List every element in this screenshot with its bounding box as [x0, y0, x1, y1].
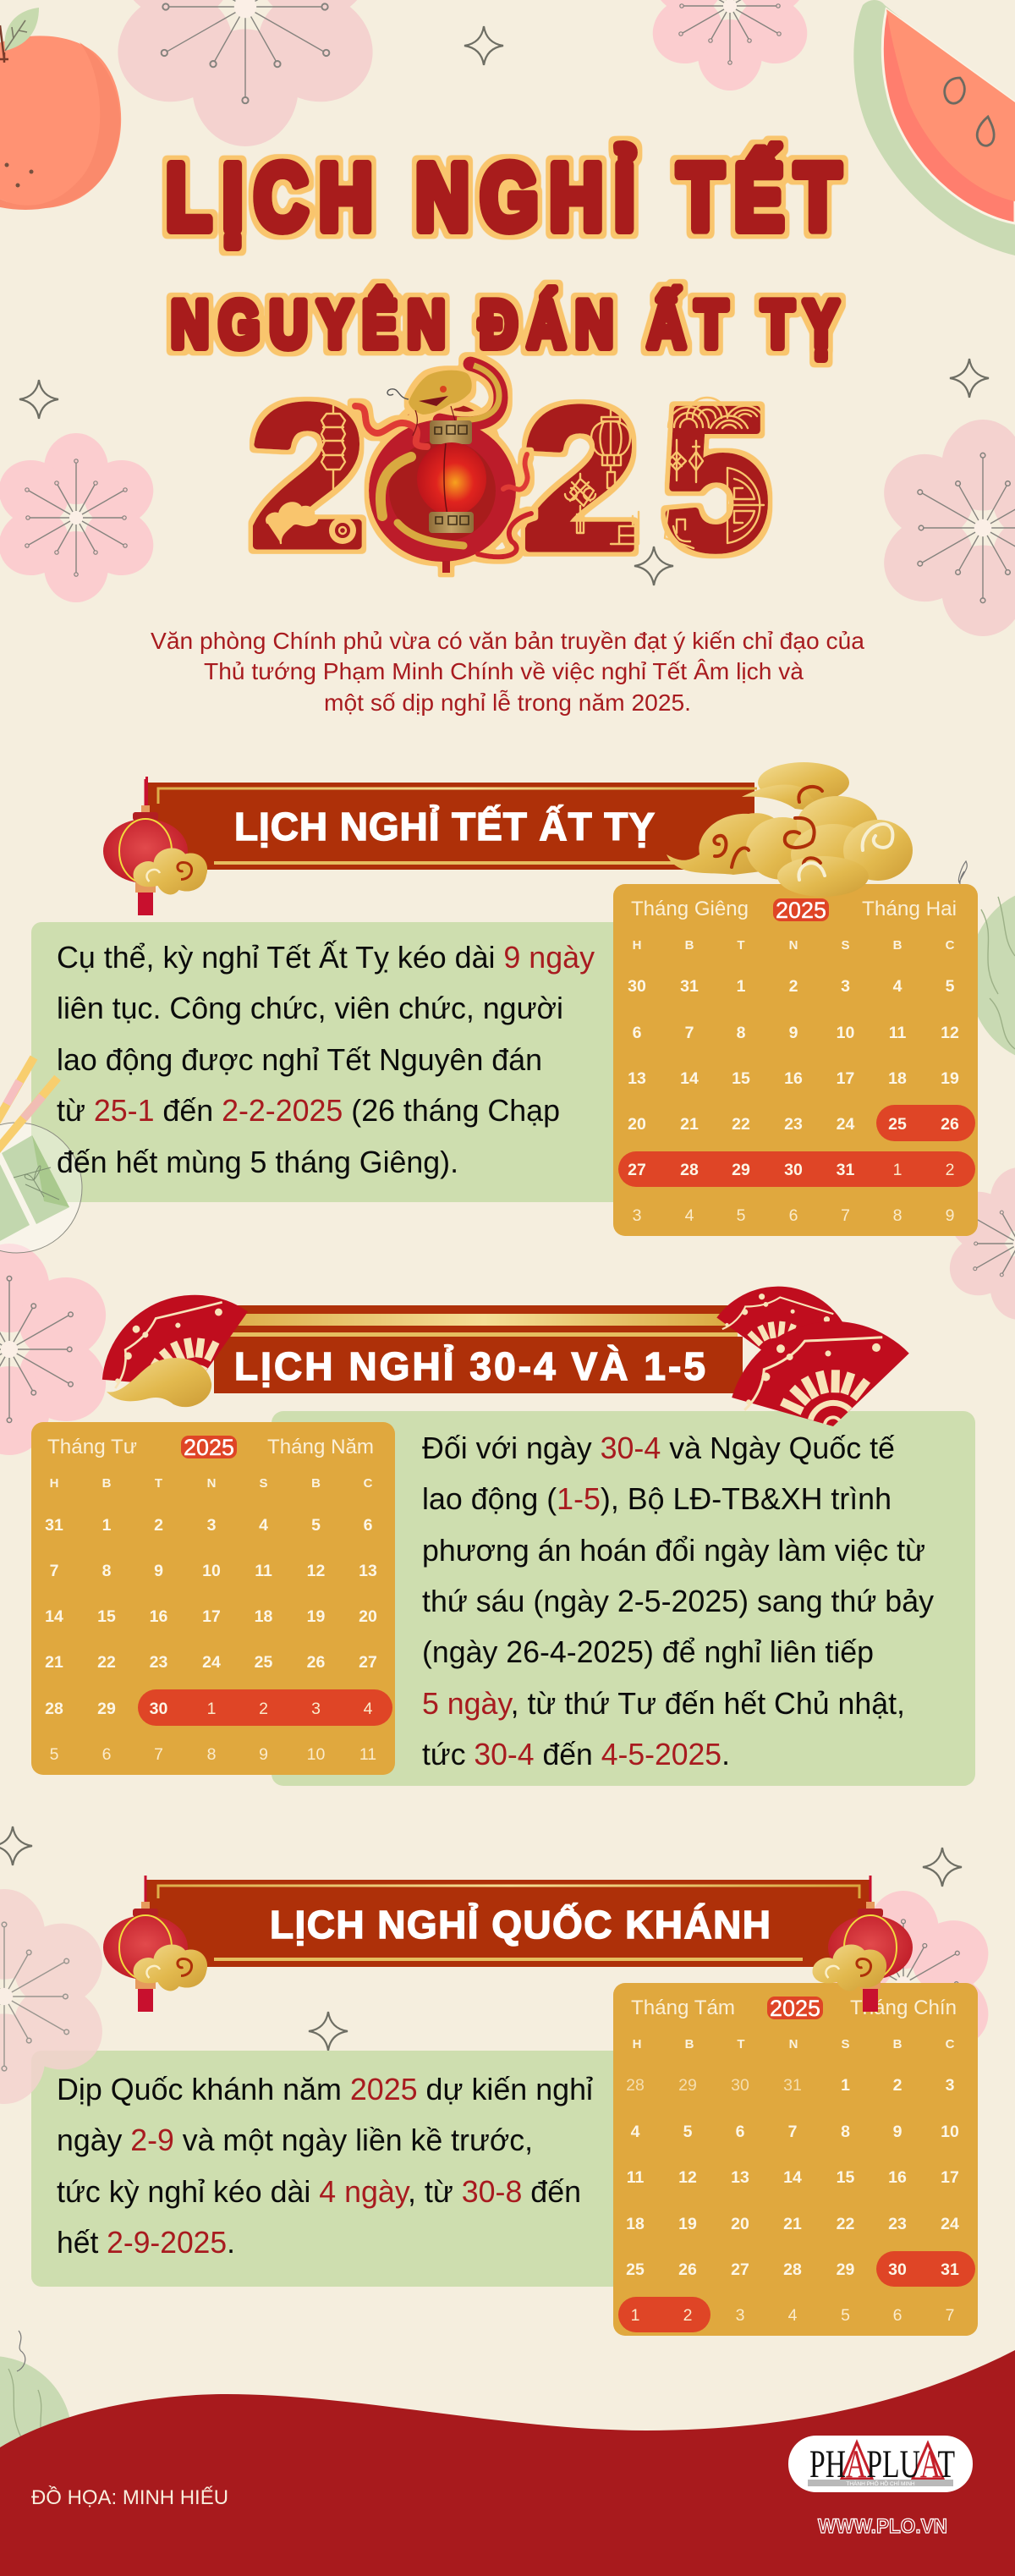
- calendar grid: 24: [202, 1653, 221, 1672]
- calendar grid: 25: [626, 2260, 645, 2279]
- calendar grid: 26: [941, 1115, 959, 1134]
- calendar grid: [626, 2037, 959, 2325]
- digits 2025: 5: [663, 367, 770, 591]
- calendar grid: 11: [255, 1562, 272, 1580]
- calendar grid: 28: [783, 2260, 802, 2279]
- credit: ĐỒ HỌA: MINH HIẾU: [31, 2485, 228, 2509]
- calendar grid: 4: [685, 1206, 694, 1225]
- calendar grid: 7: [946, 2306, 954, 2325]
- logo: [788, 2436, 973, 2492]
- calendar grid: H: [633, 938, 641, 953]
- banner: section one: [103, 762, 913, 915]
- panel: calendar April May: [31, 1422, 395, 1775]
- decor: blossom left of section two: [0, 1244, 121, 1455]
- calendar grid: 29: [732, 1161, 750, 1179]
- calendar grid: 2: [154, 1516, 163, 1535]
- calendar grid: 23: [784, 1115, 803, 1134]
- calendar grid: 30: [888, 2260, 907, 2279]
- calendar grid: 7: [685, 1024, 694, 1042]
- calendar grid: 3: [946, 2076, 955, 2095]
- calendar grid: 13: [628, 1069, 646, 1088]
- calendar grid: 24: [837, 1115, 854, 1134]
- calendar grid: 10: [837, 1024, 854, 1042]
- calendar grid: 4: [364, 1700, 373, 1718]
- calendar grid: 3: [207, 1516, 217, 1535]
- calendar grid: 26: [678, 2260, 697, 2279]
- decor: blossom right of first calendar: [939, 1167, 1015, 1320]
- calendar grid: 12: [307, 1562, 325, 1580]
- calendar grid: 5: [50, 1745, 59, 1764]
- calendar grid: 9: [893, 2123, 903, 2141]
- calendar grid: 23: [150, 1653, 167, 1672]
- calendar grid: 27: [731, 2260, 749, 2279]
- calendar grid: H: [50, 1476, 58, 1491]
- calendar grid: 3: [736, 2306, 744, 2325]
- calendar grid: 7: [841, 1206, 850, 1225]
- calendar grid: 6: [789, 1206, 798, 1225]
- digits 2025: [250, 365, 770, 591]
- icon: back right fan: [713, 1280, 852, 1369]
- icon: blossom right: [869, 420, 1015, 636]
- calendar grid: 4: [259, 1516, 268, 1535]
- calendar grid: B: [311, 1476, 321, 1491]
- calendar grid: 7: [50, 1562, 58, 1580]
- calendar grid: 21: [45, 1653, 63, 1672]
- calendar grid: 7: [788, 2123, 797, 2141]
- calendar grid: T: [155, 1476, 162, 1491]
- calendar grid: 11: [627, 2168, 644, 2187]
- calendar grid: 8: [841, 2123, 850, 2141]
- icon: watermelon: [853, 0, 1015, 255]
- calendar grid: 17: [202, 1607, 221, 1626]
- intro text: [151, 628, 864, 716]
- intro text: Văn phòng Chính phủ vừa có văn bản truyền đạt ý kiến chỉ đạo của: [151, 628, 864, 654]
- calendar grid: 13: [731, 2168, 749, 2187]
- calendar grid: [45, 1476, 377, 1764]
- calendar grid: N: [789, 938, 798, 953]
- calendar grid: 1: [841, 2076, 850, 2095]
- logo: PHAPLUAT: [809, 2442, 955, 2486]
- calendar grid: B: [685, 2037, 694, 2051]
- decor: blossom behind right lantern: [805, 1891, 1001, 2077]
- calendar header: Tháng Hai: [862, 898, 957, 920]
- calendar grid: 5: [946, 977, 955, 996]
- digits 2025: 0: [384, 366, 504, 590]
- intro text: Thủ tướng Phạm Minh Chính về việc nghỉ Tết Âm lịch và: [204, 658, 804, 684]
- calendar grid: 25: [255, 1653, 272, 1672]
- calendar grid: [628, 938, 959, 1225]
- decor: green leaf bottom left: [0, 2331, 72, 2517]
- calendar grid: 16: [784, 1069, 803, 1088]
- body text: tức kỳ nghỉ kéo dài 4 ngày, từ 30-8 đến: [57, 2174, 581, 2209]
- panel: text section one: [0, 922, 623, 1253]
- calendar grid: 13: [359, 1562, 377, 1580]
- icon: left lantern: [103, 1876, 207, 2012]
- calendar grid: 9: [154, 1562, 163, 1580]
- digits 2025: 2: [522, 367, 639, 591]
- calendar grid: 4: [631, 2123, 640, 2141]
- calendar header: Tháng Chín: [850, 1997, 957, 2019]
- calendar grid: 2: [683, 2306, 692, 2325]
- section heading: LỊCH NGHỈ QUỐC KHÁNH: [270, 1903, 771, 1947]
- body text: lao động được nghỉ Tết Nguyên đán: [57, 1042, 542, 1077]
- calendar grid: 15: [732, 1069, 750, 1088]
- body text: đến hết mùng 5 tháng Giêng).: [57, 1145, 458, 1179]
- banner: section two: [83, 1270, 922, 1448]
- calendar grid: 1: [893, 1161, 902, 1179]
- body text: (ngày 26-4-2025) để nghỉ liên tiếp: [422, 1634, 874, 1669]
- calendar grid: 26: [307, 1653, 325, 1672]
- calendar grid: 5: [311, 1516, 321, 1535]
- decorations on digit 2: [266, 406, 356, 544]
- calendar grid: 14: [783, 2168, 802, 2187]
- icon: gold cloud: [107, 1358, 211, 1407]
- calendar header: 2025: [776, 898, 826, 923]
- calendar grid: 6: [893, 2306, 902, 2325]
- section heading: LỊCH NGHỈ TẾT ẤT TỴ: [234, 805, 655, 849]
- calendar grid: 2: [946, 1161, 954, 1179]
- calendar grid: 5: [841, 2306, 850, 2325]
- calendar grid: 17: [941, 2168, 959, 2187]
- calendar grid: N: [789, 2037, 798, 2051]
- calendar grid: 30: [150, 1700, 167, 1718]
- calendar grid: 7: [154, 1745, 163, 1764]
- calendar grid: 18: [626, 2215, 645, 2233]
- calendar grid: 6: [102, 1745, 111, 1764]
- calendar grid: 31: [783, 2076, 802, 2095]
- calendar grid: 1: [737, 977, 746, 996]
- calendar grid: 6: [736, 2123, 745, 2141]
- calendar grid: 3: [311, 1700, 321, 1718]
- dragon and lantern: [355, 364, 531, 573]
- decor: chopsticks and banh chung: [0, 1057, 82, 1253]
- digits 2025: 2: [250, 365, 366, 589]
- calendar grid: 15: [97, 1607, 116, 1626]
- calendar grid: 28: [680, 1161, 699, 1179]
- calendar grid: B: [102, 1476, 112, 1491]
- calendar grid: 16: [150, 1607, 167, 1626]
- calendar grid: 1: [631, 2306, 639, 2325]
- highlighted holiday pills: [618, 1105, 975, 1187]
- calendar grid: 27: [628, 1161, 646, 1179]
- icon: lantern: [103, 779, 207, 915]
- calendar grid: 4: [788, 2306, 798, 2325]
- calendar grid: 30: [731, 2076, 749, 2095]
- calendar grid: 31: [941, 2260, 959, 2279]
- calendar header: Tháng Tư: [47, 1436, 137, 1458]
- calendar grid: 9: [259, 1745, 268, 1764]
- calendar grid: 22: [732, 1115, 750, 1134]
- calendar grid: 9: [789, 1024, 798, 1042]
- calendar grid: 10: [202, 1562, 221, 1580]
- body text: lao động (1-5), Bộ LĐ-TB&XH trình: [422, 1481, 892, 1516]
- calendar header: [631, 898, 957, 923]
- calendar grid: 24: [941, 2215, 959, 2233]
- icon: sparkle 2: [19, 380, 58, 419]
- calendar grid: 29: [97, 1700, 116, 1718]
- calendar grid: 20: [628, 1115, 646, 1134]
- calendar grid: 4: [893, 977, 903, 996]
- calendar grid: 21: [783, 2215, 802, 2233]
- calendar grid: 2: [893, 2076, 903, 2095]
- calendar grid: 5: [683, 2123, 693, 2141]
- body text: [57, 2072, 593, 2260]
- icon: sparkle 4: [634, 547, 673, 585]
- calendar grid: 5: [737, 1206, 746, 1225]
- calendar grid: H: [633, 2037, 641, 2051]
- icon: sparkle 3: [950, 359, 989, 398]
- calendar grid: 16: [888, 2168, 907, 2187]
- body text: thứ sáu (ngày 2-5-2025) sang thứ bảy: [422, 1584, 935, 1618]
- calendar header: Tháng Năm: [267, 1436, 374, 1458]
- icon: golden cloud: [667, 762, 913, 897]
- calendar grid: 2: [259, 1700, 268, 1718]
- icon: sparkle 1: [464, 26, 503, 65]
- calendar grid: 31: [45, 1516, 63, 1535]
- highlighted holiday pill: [138, 1689, 392, 1726]
- calendar grid: 28: [626, 2076, 645, 2095]
- decor: blossom left over panel: [0, 1889, 118, 2104]
- calendar grid: 27: [359, 1653, 377, 1672]
- calendar grid: 10: [307, 1745, 325, 1764]
- body text: liên tục. Công chức, viên chức, người: [57, 991, 563, 1025]
- icon: left fan: [83, 1270, 267, 1421]
- calendar grid: 29: [678, 2076, 697, 2095]
- body text: 5 ngày, từ thứ Tư đến hết Chủ nhật,: [422, 1686, 905, 1721]
- icon: sparkle 6: [923, 1848, 962, 1887]
- calendar grid: B: [893, 938, 903, 953]
- calendar grid: 21: [680, 1115, 699, 1134]
- panel: text section three: [0, 1889, 623, 2287]
- calendar header: Tháng Tám: [631, 1997, 735, 2019]
- calendar grid: 17: [837, 1069, 854, 1088]
- decorations on second digit 2: [565, 408, 639, 544]
- calendar grid: C: [946, 938, 955, 953]
- calendar grid: 9: [946, 1206, 954, 1225]
- calendar grid: S: [259, 1476, 268, 1491]
- icon: front right fan: [719, 1302, 922, 1448]
- calendar grid: 29: [837, 2260, 854, 2279]
- calendar grid: 20: [731, 2215, 749, 2233]
- calendar grid: 11: [889, 1024, 906, 1042]
- calendar grid: 18: [255, 1607, 272, 1626]
- body text: Dịp Quốc khánh năm 2025 dự kiến nghỉ: [57, 2072, 593, 2106]
- calendar grid: 12: [678, 2168, 697, 2187]
- body text: phương án hoán đổi ngày làm việc từ: [422, 1533, 925, 1568]
- calendar grid: S: [841, 938, 850, 953]
- icon: sparkle 5: [0, 1826, 32, 1865]
- decor: green leaf right: [958, 861, 1015, 1063]
- calendar grid: 18: [888, 1069, 907, 1088]
- intro text: một số dịp nghỉ lễ trong năm 2025.: [324, 689, 691, 716]
- calendar grid: 19: [941, 1069, 959, 1088]
- panel: calendar January February: [613, 884, 978, 1236]
- calendar grid: 14: [680, 1069, 699, 1088]
- title line 2: NGUYÊN ĐÁN ẤT TỴ: [171, 287, 839, 361]
- calendar grid: T: [737, 2037, 745, 2051]
- highlighted holiday pills: [618, 2251, 975, 2332]
- website: WWW.PLO.VN: [818, 2515, 947, 2538]
- calendar grid: 19: [678, 2215, 697, 2233]
- calendar grid: 30: [628, 977, 646, 996]
- calendar grid: 22: [97, 1653, 116, 1672]
- body text: Cụ thể, kỳ nghỉ Tết Ất Tỵ kéo dài 9 ngày: [57, 940, 595, 975]
- calendar grid: 8: [102, 1562, 112, 1580]
- calendar header: [631, 1996, 957, 2021]
- calendar grid: 23: [888, 2215, 907, 2233]
- calendar grid: 3: [633, 1206, 641, 1225]
- body text: [422, 1431, 935, 1771]
- calendar grid: 1: [207, 1700, 216, 1718]
- calendar grid: 11: [359, 1745, 376, 1764]
- icon: sparkle 7: [309, 2012, 348, 2051]
- section heading: LỊCH NGHỈ 30-4 VÀ 1-5: [234, 1344, 705, 1388]
- icon: blossom left: [0, 433, 166, 602]
- calendar grid: C: [946, 2037, 955, 2051]
- body text: từ 25-1 đến 2-2-2025 (26 tháng Chạp: [57, 1093, 560, 1128]
- title line 1: LỊCH NGHỈ TẾT: [166, 146, 841, 250]
- calendar grid: 1: [102, 1516, 112, 1535]
- calendar grid: 8: [893, 1206, 902, 1225]
- calendar grid: C: [364, 1476, 373, 1491]
- calendar grid: 30: [784, 1161, 803, 1179]
- body text: Đối với ngày 30-4 và Ngày Quốc tế: [422, 1431, 895, 1465]
- calendar grid: 6: [364, 1516, 373, 1535]
- icon: blossom top right: [640, 0, 820, 91]
- calendar header: [47, 1435, 374, 1460]
- calendar grid: S: [841, 2037, 850, 2051]
- year 2025 with dragon: [250, 364, 770, 591]
- calendar grid: 15: [837, 2168, 854, 2187]
- calendar grid: N: [207, 1476, 216, 1491]
- calendar header: 2025: [184, 1435, 234, 1460]
- calendar grid: 10: [941, 2123, 959, 2141]
- banner: section three: [103, 1876, 913, 2012]
- calendar grid: B: [893, 2037, 903, 2051]
- calendar grid: 28: [45, 1700, 63, 1718]
- logo: THÀNH PHỐ HỒ CHÍ MINH: [846, 2479, 915, 2487]
- calendar header: 2025: [770, 1996, 820, 2021]
- calendar grid: 25: [888, 1115, 907, 1134]
- calendar grid: 3: [841, 977, 850, 996]
- body text: hết 2-9-2025.: [57, 2225, 235, 2260]
- calendar grid: 31: [837, 1161, 854, 1179]
- calendar grid: 8: [737, 1024, 746, 1042]
- calendar grid: 12: [941, 1024, 959, 1042]
- calendar grid: B: [685, 938, 694, 953]
- calendar grid: 6: [633, 1024, 642, 1042]
- body text: tức 30-4 đến 4-5-2025.: [422, 1737, 730, 1771]
- calendar grid: 20: [359, 1607, 377, 1626]
- icon: right lantern: [813, 1876, 913, 2012]
- body text: ngày 2-9 và một ngày liền kề trước,: [57, 2123, 533, 2157]
- decorations on digit 5: [665, 398, 764, 548]
- calendar grid: 2: [789, 977, 798, 996]
- icon: apple: [0, 8, 121, 210]
- calendar grid: 19: [307, 1607, 325, 1626]
- calendar grid: 22: [837, 2215, 854, 2233]
- calendar header: Tháng Giêng: [631, 898, 749, 920]
- panel: text section two: [272, 1411, 975, 1786]
- calendar grid: T: [737, 938, 745, 953]
- icon: blossom top left: [98, 0, 392, 146]
- calendar grid: 8: [207, 1745, 216, 1764]
- calendar grid: 31: [680, 977, 699, 996]
- calendar grid: 14: [45, 1607, 63, 1626]
- panel: calendar August September: [613, 1983, 978, 2336]
- body text: [57, 940, 595, 1179]
- footer band: [0, 2350, 1015, 2576]
